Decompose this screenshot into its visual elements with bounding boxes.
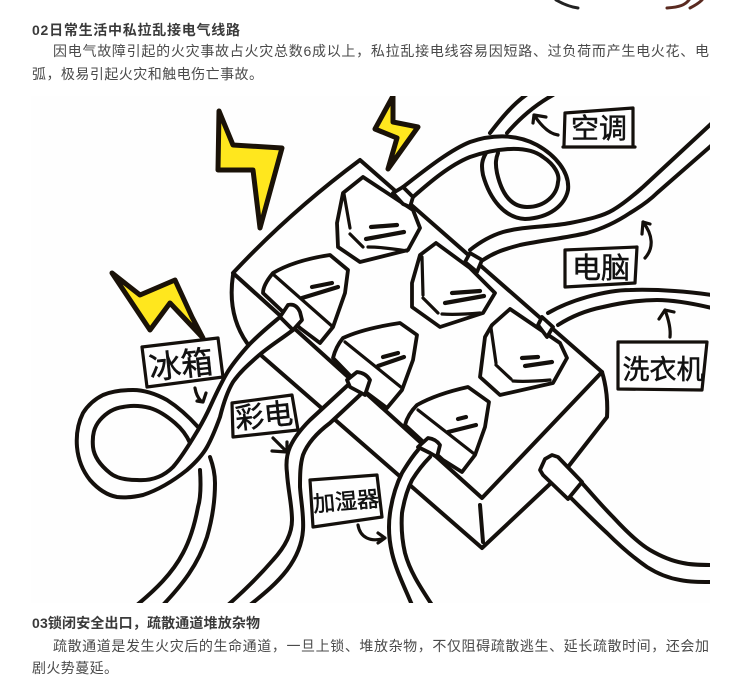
previous illustration fragment (556, 0, 702, 8)
plug: air conditioner (337, 177, 420, 262)
text block: section 02 (32, 43, 709, 82)
power strip body (232, 160, 607, 548)
arrow: washing machine (659, 310, 674, 337)
arrow: refrigerator (195, 388, 206, 402)
plug: humidifier (405, 387, 489, 472)
heading: section 03: 03锁闭安全出口，疏散通道堆放杂物 (32, 615, 260, 631)
icon: lightning bolt top (375, 96, 418, 169)
cable: television (228, 385, 360, 605)
text block: section 02: 因电气故障引起的火灾事故占火灾总数6成以上，私拉乱接电线容易因短路、过负荷而产生电火花、电 (53, 43, 709, 59)
arrow: television (272, 438, 287, 452)
cable: air conditioner (403, 95, 568, 219)
cable: washing machine (548, 290, 712, 325)
text block: section 02: 弧，极易引起火灾和触电伤亡事故。 (32, 66, 263, 82)
cable: humidifier (389, 450, 432, 605)
label: washing machine: 洗衣机 (622, 348, 704, 387)
text block: section 03: 剧火势蔓延。 (32, 660, 118, 676)
arrow: air conditioner (533, 115, 558, 135)
label: humidifier: 加湿器 (312, 481, 380, 519)
cable: spare plug (570, 483, 712, 582)
plug: computer (412, 243, 495, 327)
arrow: humidifier (358, 525, 385, 543)
cable: refrigerator (77, 317, 293, 605)
label: refrigerator: 冰箱 (147, 337, 215, 389)
heading: section 02: 02日常生活中私拉乱接电气线路 (32, 22, 240, 38)
icon: lightning bolt left (218, 111, 282, 228)
plug: television (333, 323, 417, 408)
label: humidifier (310, 475, 382, 527)
illustration: overloaded power strip (31, 95, 712, 605)
label: television: 彩电 (233, 390, 295, 438)
plug: washing machine (480, 309, 567, 395)
plug: spare connector (540, 455, 582, 499)
plug: refrigerator (263, 255, 348, 343)
label: air conditioner: 空调 (571, 107, 627, 147)
arrow: computer (642, 222, 651, 258)
text block: section 03 (32, 638, 709, 676)
text block: section 03: 疏散通道是发生火灾后的生命通道，一旦上锁、堆放杂物，不仅阻碍疏散逃生、延长疏散时间，还会加 (53, 638, 709, 654)
label: computer: 电脑 (572, 245, 630, 287)
icon: lightning bolt lower left (112, 273, 203, 338)
cable: computer (470, 123, 712, 260)
